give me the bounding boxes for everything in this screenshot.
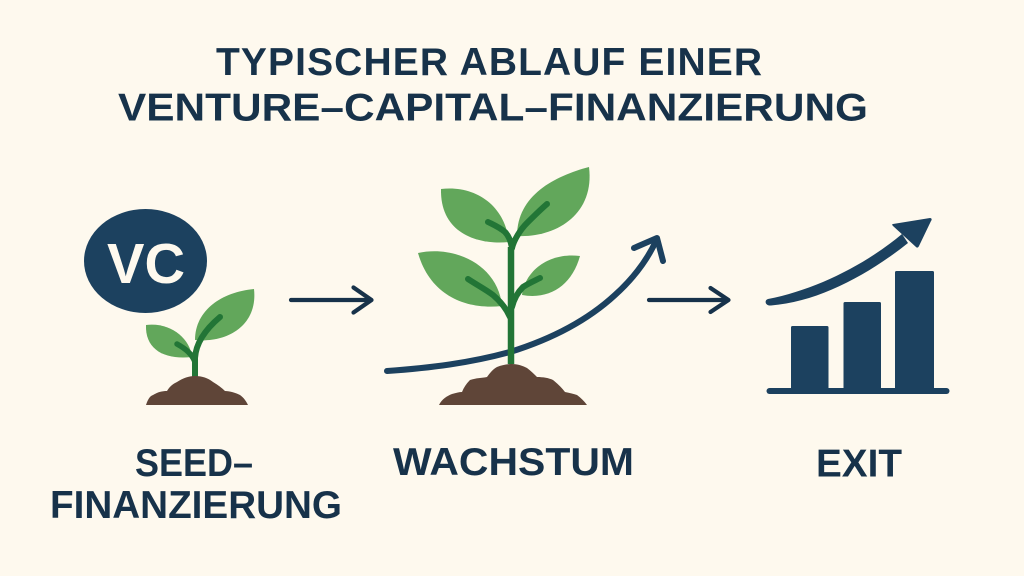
label: growth: WACHSTUM (393, 441, 634, 484)
icon: bar chart with rising arrow (766, 218, 950, 394)
label: seed financing: FINANZIERUNG (50, 484, 342, 527)
arrow: growth to exit (649, 288, 728, 312)
label: seed financing (50, 442, 342, 527)
icon: VC badge: VC (107, 232, 185, 296)
arrow: seed to growth (291, 288, 372, 312)
title (118, 41, 868, 130)
title: TYPISCHER ABLAUF EINER (216, 41, 762, 84)
icon: VC badge (84, 209, 207, 313)
label: exit: EXIT (816, 442, 902, 486)
icon: growth curve arrow (387, 238, 663, 371)
panel: exit stage (766, 218, 950, 486)
label: seed financing: SEED– (135, 442, 253, 485)
icon: seedling (146, 289, 254, 405)
panel: seed stage (50, 209, 342, 527)
icon: plant (418, 167, 590, 405)
panel: growth stage (387, 167, 663, 484)
title: VENTURE–CAPITAL–FINANZIERUNG (118, 86, 868, 130)
